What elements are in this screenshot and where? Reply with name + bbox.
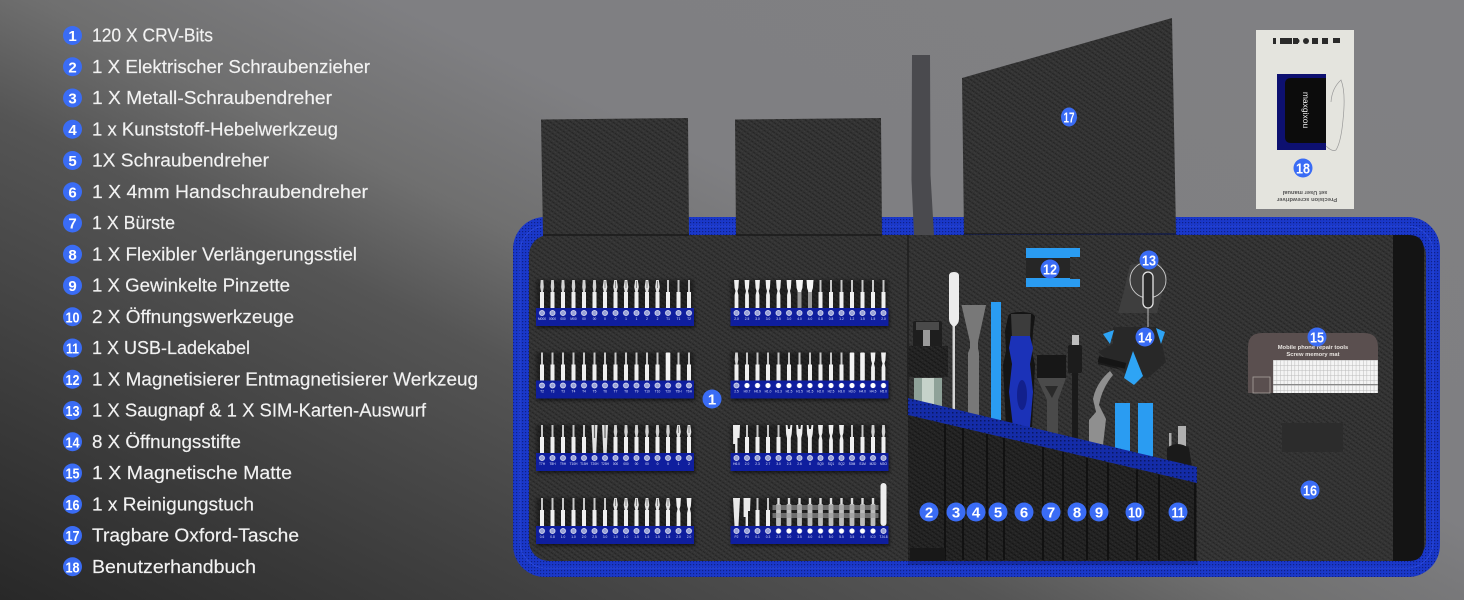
pocket top middle bbox=[735, 118, 882, 236]
list item 18: 18 bbox=[66, 559, 80, 576]
bit strip right 1: 1.2 bbox=[850, 317, 854, 321]
bit strip right 3: 2.6 bbox=[797, 462, 802, 466]
badge 6 bbox=[1014, 502, 1034, 522]
bottom blue edge over pockets bbox=[908, 561, 1198, 565]
bit strip left 2: T4 bbox=[582, 390, 586, 394]
badge 1 bbox=[702, 390, 722, 408]
bit strip left 2: T6H bbox=[686, 390, 693, 394]
list item 14: 8 X Öffnungsstifte bbox=[92, 432, 241, 452]
bit strip left 4: 1.5 bbox=[634, 535, 639, 539]
opening picks bbox=[1098, 327, 1166, 385]
bit strip left 2: T2 bbox=[540, 390, 544, 394]
bit strip right 4: 0.1 bbox=[755, 535, 760, 539]
bit strip right 4: 3.5 bbox=[797, 535, 802, 539]
bit strip right 2: H1.5 bbox=[796, 390, 803, 394]
badge 7 bbox=[1042, 502, 1060, 522]
bit strip right 2: H0.9 bbox=[754, 390, 761, 394]
bit strip right 4: P2 bbox=[735, 535, 739, 539]
bit strip left 4: 0.8 bbox=[550, 535, 555, 539]
bit strip right 2: H3.0 bbox=[849, 390, 856, 394]
list item 13: 13 bbox=[66, 403, 80, 420]
bit strip left 2: T4 bbox=[572, 390, 576, 394]
bit strip left 4: 1.0 bbox=[571, 535, 576, 539]
bit strip right 4 bbox=[730, 483, 890, 546]
bit strip right 3: 8 bbox=[809, 462, 811, 466]
bit strip left 1: T2 bbox=[687, 317, 691, 321]
bit strip right 2: H0.7 bbox=[744, 390, 751, 394]
pocket 17 flap bbox=[962, 18, 1176, 234]
bit strip left 3: 2 bbox=[688, 462, 690, 466]
badge 17 bbox=[1061, 108, 1077, 126]
bit strip right 3: S0M bbox=[849, 462, 856, 466]
bit strip right 2: H4.0 bbox=[859, 390, 866, 394]
badge 13: 13 bbox=[1142, 252, 1156, 270]
list item 16: 1 x Reinigungstuch bbox=[92, 494, 254, 514]
bit strip right 4: 5.0 bbox=[829, 535, 833, 539]
bit strip left 4: 1.5 bbox=[655, 535, 660, 539]
bit strip left 3: 00 bbox=[645, 462, 649, 466]
badge 12: 12 bbox=[1043, 262, 1057, 278]
slanted blue band bbox=[908, 398, 1197, 483]
bit strip right 4: P5 bbox=[745, 535, 749, 539]
bit strip right 4: 5.5 bbox=[839, 535, 844, 539]
cleaning cloth pocket bbox=[1233, 423, 1393, 560]
bit strip left 4 bbox=[536, 498, 695, 546]
badge 8: 8 bbox=[1073, 504, 1081, 522]
bit strip right 2: H5.0 bbox=[880, 390, 887, 394]
list item 13: 1 X Saugnapf & 1 X SIM-Karten-Auswurf bbox=[92, 400, 427, 420]
bit strip right 3: SQ2 bbox=[838, 462, 845, 466]
bit strip left 4: 3.0 bbox=[603, 535, 607, 539]
bit strip left 1: 1 bbox=[636, 317, 638, 321]
bit strip left 4: 1.0 bbox=[613, 535, 618, 539]
bit strip right 4: 4.5 bbox=[860, 535, 865, 539]
case blue frame bbox=[513, 217, 1440, 577]
bit strip left 2: T7 bbox=[614, 390, 618, 394]
magnetic mat: Screw memory mat bbox=[1286, 352, 1340, 358]
tool: opening tools bbox=[1115, 403, 1153, 459]
pocket top left bbox=[541, 118, 689, 236]
list item 2: 2 bbox=[68, 59, 77, 76]
suction cup and SIM pin bbox=[1118, 259, 1167, 328]
bit strip left 3: T25H bbox=[601, 462, 610, 466]
bit strip right 4: 2.5 bbox=[776, 535, 781, 539]
bit strip left 4: 0.6 bbox=[540, 535, 544, 539]
list item 6: 1 X 4mm Handschraubendreher bbox=[92, 182, 368, 202]
bit strip left 3: T9H bbox=[560, 462, 567, 466]
badge 11: 11 bbox=[1172, 504, 1184, 522]
bit strip left 4: 2.0 bbox=[687, 535, 691, 539]
badge 5: 5 bbox=[994, 504, 1002, 522]
list item 4: 1 x Kunststoff-Hebelwerkzeug bbox=[92, 119, 338, 139]
bit strip right 4: 3.0 bbox=[787, 535, 791, 539]
list item 10: 2 X Öffnungswerkzeuge bbox=[92, 307, 294, 327]
user manual: set User manual bbox=[1282, 189, 1327, 195]
bit strip left 4: 2.5 bbox=[592, 535, 597, 539]
bit strip left 4: 2.0 bbox=[676, 535, 681, 539]
bit strip right 1: 3.0 bbox=[787, 317, 791, 321]
bit strip left 4: 1.0 bbox=[561, 535, 565, 539]
bit strip right 3: M3O bbox=[880, 462, 887, 466]
bit strip right 4: 3.5 bbox=[850, 535, 854, 539]
carrying case bbox=[513, 217, 1440, 577]
list item 5: 5 bbox=[68, 153, 77, 170]
bit strip right 1: 2.5 bbox=[745, 317, 749, 321]
bit strip right 3: 2.3 bbox=[755, 462, 760, 466]
bit strip right 3: 2.7 bbox=[766, 462, 770, 466]
case inner lining bbox=[529, 235, 1426, 561]
bit strip right 2: H1.3 bbox=[775, 390, 782, 394]
badge 4: 4 bbox=[972, 504, 981, 522]
tool: metal pry tool bbox=[962, 305, 986, 415]
bit strip left 1: T1 bbox=[677, 317, 681, 321]
bit strip right 1: 1.2 bbox=[839, 317, 844, 321]
bit strip right 1: 3.5 bbox=[776, 317, 781, 321]
badge 7: 7 bbox=[1047, 504, 1055, 522]
badge 14: 14 bbox=[1138, 330, 1153, 346]
bit strip right 2: H4.5 bbox=[870, 390, 877, 394]
badge 15: 15 bbox=[1310, 330, 1324, 346]
tool: flexible extension bbox=[1068, 335, 1082, 443]
right velcro flap bbox=[1393, 235, 1424, 561]
bit strip right 2: H1.0 bbox=[765, 390, 772, 394]
bit strip left 3: 00 bbox=[635, 462, 638, 466]
bit strip left 3: T7H bbox=[539, 462, 546, 466]
list item 7: 7 bbox=[68, 216, 77, 232]
bit strip left 1: T1 bbox=[666, 317, 670, 321]
list item 2: 1 X Elektrischer Schraubenzieher bbox=[92, 57, 370, 77]
tool: screwdriver handle bbox=[1003, 312, 1035, 427]
bit strip left 1: 0 bbox=[604, 317, 606, 321]
bit strip left 3: 0 bbox=[657, 462, 659, 466]
magnetic mat: Mobile phone repair tools bbox=[1278, 345, 1348, 351]
list item 6: 6 bbox=[68, 184, 77, 201]
bit strip left 1: 00 bbox=[593, 317, 596, 321]
tool: electric screwdriver bbox=[908, 321, 948, 408]
bit strip right 3 bbox=[730, 425, 890, 473]
bit strip left 3: 1 bbox=[678, 462, 680, 466]
badge 16: 16 bbox=[1303, 482, 1317, 500]
bit strip right 3: 2.3 bbox=[787, 462, 791, 466]
list item 8: 8 bbox=[68, 247, 77, 264]
bit strip left 2: T8 bbox=[624, 390, 628, 394]
bit strip right 3: SQ0 bbox=[817, 462, 824, 466]
bit strip left 1: 00 bbox=[582, 317, 586, 321]
badge 4 bbox=[966, 502, 986, 522]
badge 18: 18 bbox=[1296, 160, 1310, 178]
badge 6: 6 bbox=[1020, 504, 1028, 522]
list item 10: 10 bbox=[66, 309, 80, 326]
bit strip left 1: 000 bbox=[560, 317, 566, 321]
bit strip right 1: 1.5 bbox=[860, 317, 865, 321]
bit strip right 2: H1.5 bbox=[807, 390, 814, 394]
stitching lines bbox=[520, 226, 1433, 568]
tool: brush bbox=[1037, 355, 1066, 435]
bit strip left 3: T8H bbox=[549, 462, 556, 466]
badge 9: 9 bbox=[1095, 504, 1103, 522]
pocket shadow bbox=[543, 234, 1176, 235]
list item 7: 1 X Bürste bbox=[92, 213, 175, 233]
badge 9 bbox=[1090, 502, 1108, 522]
list item 18: Benutzerhandbuch bbox=[92, 557, 256, 577]
bit strip right 1: 0.8 bbox=[818, 317, 823, 321]
list item 11: 11 bbox=[66, 340, 79, 358]
bit strip left 2 bbox=[536, 352, 695, 400]
list item 1: 120 X CRV-Bits bbox=[92, 26, 213, 46]
list item 11: 1 X USB-Ladekabel bbox=[92, 338, 250, 358]
bit strip left 3: T15H bbox=[580, 462, 589, 466]
bit strip left 4: 1.0 bbox=[624, 535, 628, 539]
bit strip right 1: 4.0 bbox=[808, 317, 812, 321]
bit strip left 3: 0 bbox=[667, 462, 669, 466]
bit strip right 1: 0.8 bbox=[829, 317, 833, 321]
magnetic mat bbox=[1248, 333, 1378, 393]
bit strip right 3: SQ1 bbox=[828, 462, 834, 466]
list item 4: 4 bbox=[68, 122, 77, 139]
badge 1: 1 bbox=[708, 392, 716, 408]
list item 12: 1 X Magnetisierer Entmagnetisierer Werkzeug bbox=[92, 369, 478, 389]
bit strip right 2: H2.5 bbox=[828, 390, 835, 394]
bit strip left 4: 1.5 bbox=[645, 535, 649, 539]
user manual: Precision screwdriver bbox=[1276, 196, 1337, 202]
bit strip right 1: 1.5 bbox=[871, 317, 875, 321]
bit strip right 4: TJ4.8 bbox=[880, 535, 888, 539]
badge 2: 2 bbox=[925, 504, 933, 522]
bit strip left 2: T5 bbox=[593, 390, 597, 394]
bit strip left 1: 0 bbox=[615, 317, 617, 321]
bit strip left 1: 2 bbox=[657, 317, 659, 321]
tool: USB cable bbox=[1167, 426, 1192, 468]
list item 8: 1 X Flexibler Verlängerungsstiel bbox=[92, 244, 357, 264]
bit strip right 3: S1M bbox=[859, 462, 866, 466]
list item 17: Tragbare Oxford-Tasche bbox=[92, 526, 299, 546]
bit strip right 1: 2.0 bbox=[881, 317, 886, 321]
list item 14: 14 bbox=[66, 434, 80, 451]
bit strip right 1: 2.0 bbox=[734, 317, 739, 321]
bit strip right 4: 4.5 bbox=[818, 535, 823, 539]
bit strip left 1: 0000 bbox=[549, 317, 556, 321]
bit strip left 3: 000 bbox=[613, 462, 618, 466]
bit strip right 1: 4.0 bbox=[797, 317, 802, 321]
bit strip left 3 bbox=[536, 425, 695, 473]
bit strip left 3: T20H bbox=[591, 462, 599, 466]
list item 3: 1 X Metall-Schraubendreher bbox=[92, 88, 332, 108]
bit strip left 2: T10 bbox=[644, 390, 650, 394]
user manual: maxgixou bbox=[1301, 92, 1311, 128]
badge 5 bbox=[988, 502, 1008, 522]
tool: angled tweezers bbox=[1089, 357, 1126, 445]
bit strip left 1: M00 bbox=[570, 317, 577, 321]
bit strip left 2: T20 bbox=[665, 390, 671, 394]
list item 15: 15 bbox=[66, 466, 80, 482]
bit strip left 1 bbox=[536, 280, 695, 328]
bit strip left 3: T10H bbox=[570, 462, 578, 466]
bit strip right 2: 2.5 bbox=[734, 390, 739, 394]
bit strip left 4: 2.0 bbox=[582, 535, 586, 539]
manual icon row bbox=[1273, 38, 1340, 44]
bit strip right 3: M2D bbox=[870, 462, 877, 466]
bit strip left 1: 1 bbox=[625, 317, 627, 321]
bit strip right 2: H3.0 bbox=[838, 390, 845, 394]
badge 3 bbox=[946, 502, 966, 522]
badge 2 bbox=[920, 502, 938, 522]
badge 3: 3 bbox=[952, 504, 960, 522]
list item 12: 12 bbox=[66, 372, 80, 389]
tool: blue plastic pry tool bbox=[991, 302, 1001, 422]
bit strip left 2: T6 bbox=[603, 390, 607, 394]
strap bbox=[912, 55, 934, 235]
list item 1: 1 bbox=[68, 28, 77, 45]
list item 9: 9 bbox=[68, 278, 77, 295]
bit strip right 3: 2.0 bbox=[745, 462, 749, 466]
bit strip right 4: 0.3 bbox=[766, 535, 770, 539]
bit strip right 2: H2.0 bbox=[817, 390, 824, 394]
badge 8 bbox=[1068, 502, 1086, 522]
list of contents bbox=[63, 26, 478, 577]
bit strip right 1 bbox=[730, 280, 890, 328]
list item 16: 16 bbox=[66, 497, 80, 514]
list item 9: 1 X Gewinkelte Pinzette bbox=[92, 276, 290, 296]
list item 15: 1 X Magnetische Matte bbox=[92, 463, 292, 483]
bit strip right 4: 4.0 bbox=[808, 535, 812, 539]
bit strip left 2: T3 bbox=[551, 390, 555, 394]
bit strip right 1: 3.0 bbox=[766, 317, 770, 321]
bit strip left 4: 1.5 bbox=[666, 535, 670, 539]
bit strip left 2: T5H bbox=[675, 390, 682, 394]
badge 10: 10 bbox=[1128, 504, 1142, 522]
tool: spudger with metal shaft bbox=[949, 272, 959, 412]
bit strip right 2 bbox=[730, 352, 890, 400]
bit strip right 2: H1.5 bbox=[786, 390, 793, 394]
magnetizer tool bbox=[1026, 248, 1080, 287]
badge 17: 17 bbox=[1064, 110, 1074, 126]
list item 3: 3 bbox=[68, 90, 77, 108]
bit strip right 1: 3.0 bbox=[755, 317, 760, 321]
list item 17: 17 bbox=[66, 528, 80, 545]
list item 5: 1X Schraubendreher bbox=[92, 150, 269, 170]
bit strip right 4: IC0 bbox=[871, 535, 876, 539]
bit strip left 1: M000 bbox=[538, 317, 546, 321]
user manual bbox=[1256, 30, 1354, 209]
bit strip left 2: T9 bbox=[635, 390, 639, 394]
bit strip right 3: 3.0 bbox=[776, 462, 781, 466]
slanted pockets bbox=[908, 398, 1197, 561]
bit strip left 1: 2 bbox=[646, 317, 648, 321]
bit strip right 3: H6.0 bbox=[733, 462, 740, 466]
bit strip left 2: T3 bbox=[561, 390, 565, 394]
bit strip left 2: T10 bbox=[655, 390, 660, 394]
bit strip left 3: 000 bbox=[623, 462, 629, 466]
